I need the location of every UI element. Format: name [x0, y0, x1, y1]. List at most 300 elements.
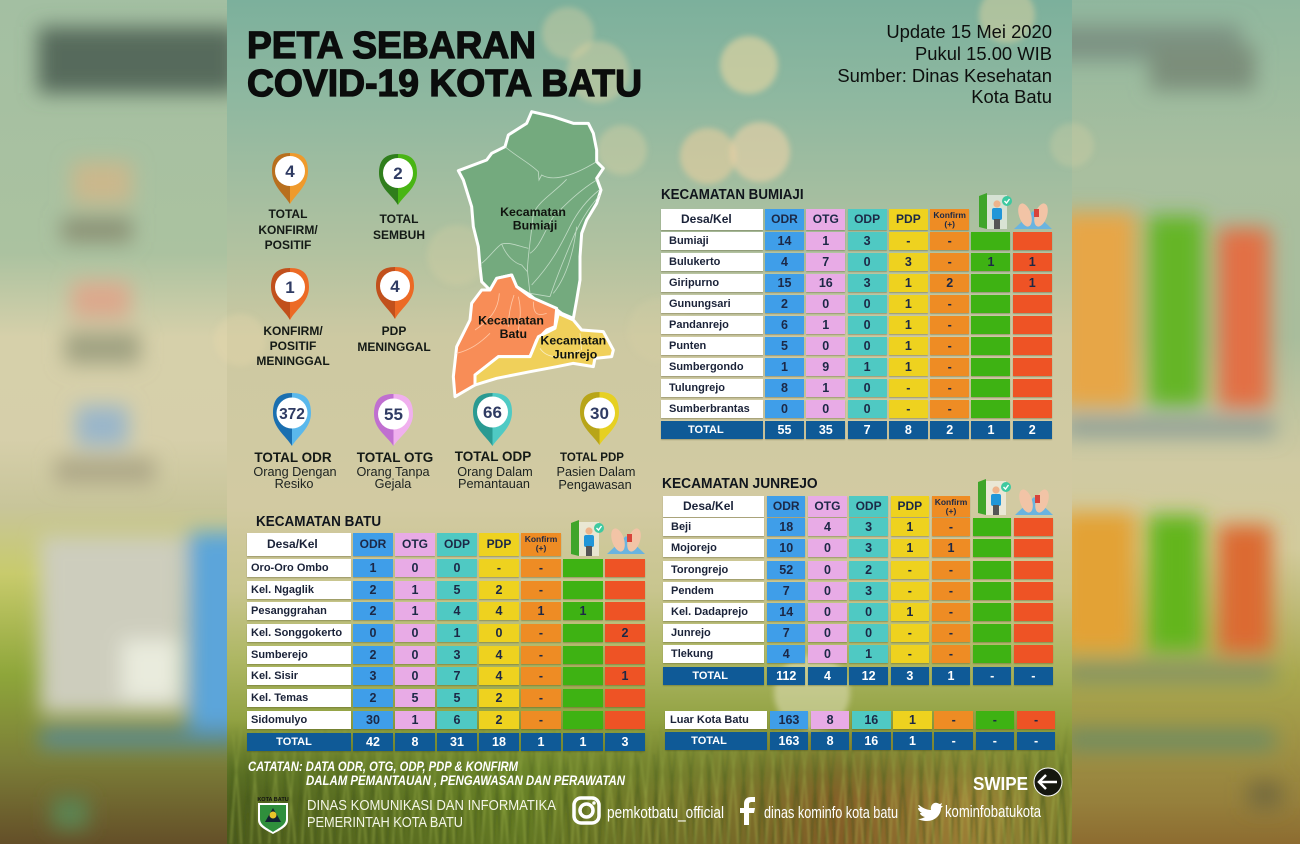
icon: facebook	[740, 797, 755, 825]
row: Kel. Dadaprejo: 14	[779, 605, 793, 619]
row: Mojorejo: 1	[906, 541, 913, 555]
row: Tulungrejo: 0	[864, 381, 871, 395]
row: Kel. Songgokerto: 2	[622, 626, 628, 640]
row: Kel. Sisir: 4	[496, 669, 502, 683]
row: Oro-Oro Ombo: 1	[370, 561, 376, 575]
row: Kel. Sisir: 0	[412, 669, 418, 683]
row: total: 1	[909, 734, 916, 748]
note text	[248, 759, 625, 788]
row: total: -	[1034, 734, 1038, 748]
row: Torongrejo: 52	[779, 563, 793, 577]
row: Luar Kota Batu: -	[952, 713, 956, 727]
table: Luar Kota Batu	[665, 711, 1053, 750]
row: total: 163	[778, 734, 799, 748]
map label: Batu: Kecamatan	[478, 313, 544, 327]
arrow: swipe left	[1034, 768, 1062, 796]
row: total: 112	[776, 669, 796, 683]
row: total: 4	[824, 669, 831, 683]
table: Kecamatan Batu	[246, 533, 646, 752]
row: Sumbergondo: 1	[781, 360, 788, 374]
table: Kecamatan Junrejo	[662, 496, 1054, 686]
row: Pandanrejo	[660, 316, 1052, 336]
map label: Junrejo: Kecamatan	[540, 334, 606, 348]
table header: Desa/Kel	[681, 212, 732, 226]
icon: recovered person, Batu	[571, 520, 604, 556]
row: total: 42	[366, 735, 380, 749]
row: Sumberbrantas: 0	[781, 402, 788, 416]
row: Sumbergondo: -	[948, 360, 952, 374]
stat: total konfirm positif: KONFIRM/	[258, 223, 318, 237]
row: Kel. Temas: 2	[496, 691, 502, 705]
row: Giripurno: 1	[1029, 276, 1036, 290]
region: Kecamatan Bumiaji	[458, 112, 603, 318]
table header: ODR	[773, 499, 800, 513]
table header: Desa/Kel	[267, 537, 318, 551]
row: total: 55	[778, 423, 791, 437]
stat: total otg: 55	[384, 405, 403, 424]
row: Junrejo: 0	[865, 626, 872, 640]
row: Kel. Songgokerto: 0	[412, 626, 418, 640]
row: Sumberbrantas: 0	[864, 402, 871, 416]
instagram handle: pemkotbatu_official	[607, 803, 724, 822]
stat: total odp: Orang Dalam	[457, 465, 533, 479]
row: Giripurno: 16	[819, 276, 833, 290]
row: Tulungrejo: Tulungrejo	[669, 382, 725, 394]
row: total: 1	[987, 423, 994, 437]
title: PETA SEBARAN	[247, 25, 536, 67]
row: Bumiaji: 14	[778, 234, 791, 248]
row: Tulungrejo: 1	[822, 381, 829, 395]
row: Kel. Dadaprejo: 0	[865, 605, 872, 619]
stat: total odp: Pemantauan	[458, 477, 530, 491]
table header: PDP	[897, 499, 922, 513]
row: Pandanrejo: 1	[905, 318, 912, 332]
row: total: TOTAL	[276, 736, 312, 748]
row: Tulungrejo: 8	[781, 381, 788, 395]
stat: total otg: TOTAL OTG	[357, 450, 433, 465]
row: Beji	[662, 518, 1054, 538]
row: Bulukerto: 7	[822, 255, 829, 269]
row: Oro-Oro Ombo: -	[497, 561, 501, 575]
table header: (+)	[944, 219, 955, 229]
row: Sumberejo: 2	[370, 648, 376, 662]
twitter handle: kominfobatukota	[945, 802, 1041, 821]
row: Sumberejo: 3	[454, 648, 460, 662]
row: Tulungrejo	[660, 379, 1052, 398]
row: Pendem	[662, 582, 1054, 602]
row: Gunungsari	[660, 295, 1052, 314]
update information text block	[837, 21, 1052, 107]
row: Luar Kota Batu: -	[1034, 713, 1038, 727]
row: Kel. Temas: -	[539, 691, 543, 705]
row: Luar Kota Batu: 8	[827, 713, 834, 727]
icon: recovered person, Junrejo	[978, 479, 1011, 515]
stat: pdp meninggal: PDP	[382, 324, 406, 338]
table header: PDP	[487, 537, 511, 551]
table header: ODR	[360, 537, 386, 551]
stat: total pdp: Pasien Dalam	[557, 465, 635, 479]
row: Luar Kota Batu: 1	[909, 713, 916, 727]
stat: total konfirm positif: 4	[285, 162, 295, 181]
row: Kel. Songgokerto	[246, 624, 646, 644]
row: Bulukerto: -	[948, 255, 952, 269]
row: Giripurno	[660, 274, 1052, 294]
row: Kel. Temas: 5	[454, 691, 460, 705]
row: total	[665, 732, 1055, 750]
table header: ODP	[854, 212, 880, 226]
region: Kecamatan Junrejo	[475, 313, 613, 385]
logo: Kota Batu crest: KOTA BATU	[257, 797, 289, 803]
row: total: 1	[538, 735, 544, 749]
row: Mojorejo: 0	[824, 541, 831, 555]
row: Bumiaji: 1	[822, 234, 829, 248]
row: Junrejo: 0	[824, 626, 831, 640]
table header: OTG	[813, 212, 839, 226]
row: Punten: 0	[822, 339, 829, 353]
background: bokeh lights and grass	[227, 0, 1094, 844]
row: Sumberejo: Sumberejo	[251, 649, 308, 661]
row: Beji: 3	[865, 520, 872, 534]
row: Kel. Sisir: 1	[622, 669, 628, 683]
row: Sidomulyo: 1	[412, 713, 418, 727]
row: Tulungrejo: -	[948, 381, 952, 395]
row: Kel. Sisir: 3	[370, 669, 376, 683]
stat: pdp meninggal	[357, 267, 431, 354]
map label: Bumiaji: Kecamatan	[500, 205, 566, 219]
row: Pendem: Pendem	[671, 585, 714, 597]
row: Kel. Ngaglik: 5	[454, 583, 460, 597]
row: total: -	[952, 734, 956, 748]
stat: total pdp: TOTAL PDP	[560, 452, 624, 464]
row: Pendem: 3	[865, 584, 872, 598]
row: Kel. Dadaprejo: 0	[824, 605, 831, 619]
row: Tulungrejo: -	[906, 381, 910, 395]
row: Sumberejo: 0	[412, 648, 418, 662]
row: Bumiaji: Bumiaji	[669, 235, 709, 247]
row: Gunungsari: Gunungsari	[669, 298, 731, 310]
stat: total konfirm positif	[258, 153, 318, 252]
row: Tlekung: 1	[865, 647, 872, 661]
row: Mojorejo	[662, 539, 1054, 558]
stat: total otg: Orang Tanpa	[356, 465, 431, 479]
stat: total pdp	[557, 392, 635, 492]
row: Sumberejo	[246, 646, 646, 666]
row: Kel. Ngaglik: Kel. Ngaglik	[251, 584, 314, 596]
table header: Desa/Kel	[683, 499, 734, 513]
note text: DALAM PEMANTAUAN , PENGAWASAN DAN PERAWATAN	[306, 773, 625, 788]
stat: konfirm positif meninggal: POSITIF	[270, 339, 316, 353]
row: Pandanrejo: 6	[781, 318, 788, 332]
table header: ODP	[444, 537, 470, 551]
row: Kel. Songgokerto: 1	[454, 626, 460, 640]
map label: Batu name: Batu	[500, 327, 527, 341]
row: total: 31	[450, 735, 464, 749]
row: Pandanrejo: -	[948, 318, 952, 332]
row: Junrejo: -	[949, 626, 953, 640]
row: Junrejo: -	[908, 626, 912, 640]
stat: total otg: Gejala	[375, 477, 412, 491]
row: Gunungsari: 0	[864, 297, 871, 311]
row: Sidomulyo: 6	[454, 713, 460, 727]
table header: PDP	[896, 212, 921, 226]
icon: recovered person, Bumiaji	[979, 193, 1012, 229]
row: Giripurno: 1	[905, 276, 912, 290]
table header	[246, 533, 562, 558]
row: Kel. Dadaprejo: 1	[906, 605, 913, 619]
row: Punten: Punten	[669, 340, 706, 352]
row: Junrejo	[662, 624, 1054, 644]
stat: total pdp: 30	[590, 404, 609, 423]
row: Punten	[660, 337, 1052, 356]
row: Giripurno: 15	[778, 276, 791, 290]
table header: (+)	[536, 543, 546, 553]
row: Luar Kota Batu: 163	[778, 713, 799, 727]
row: Luar Kota Batu: Luar Kota Batu	[670, 714, 749, 726]
stat: total konfirm positif: TOTAL	[269, 207, 307, 221]
row: Punten: 0	[864, 339, 871, 353]
row: Pendem: 7	[783, 584, 790, 598]
row: total: -	[990, 669, 994, 683]
row: total: 2	[946, 423, 953, 437]
row: Sumberbrantas: -	[906, 402, 910, 416]
note text: CATATAN: DATA ODR, OTG, ODP, PDP & KONFIRM	[248, 759, 519, 774]
stat: total sembuh	[373, 154, 425, 242]
row: Punten: 5	[781, 339, 788, 353]
row: Sumberbrantas: -	[948, 402, 952, 416]
row: Pandanrejo: Pandanrejo	[669, 319, 729, 331]
row: total: 18	[492, 735, 506, 749]
stat: total odr: 372	[279, 406, 305, 423]
row: Luar Kota Batu: 16	[864, 713, 878, 727]
row: Bumiaji: -	[948, 234, 952, 248]
row: Bulukerto: Bulukerto	[669, 256, 720, 268]
row: Mojorejo: 10	[779, 541, 793, 555]
row: Pandanrejo: 0	[864, 318, 871, 332]
row: Kel. Ngaglik	[246, 581, 646, 600]
table header: ODR	[771, 212, 798, 226]
row: Bumiaji: -	[906, 234, 910, 248]
icon: instagram	[574, 798, 599, 823]
row: Bulukerto: 0	[864, 255, 871, 269]
stat: konfirm positif meninggal: KONFIRM/	[263, 324, 323, 338]
agency name	[307, 798, 556, 831]
row: Kel. Sisir: Kel. Sisir	[251, 670, 298, 682]
stat: total odr	[253, 393, 337, 491]
row: Punten: 1	[905, 339, 912, 353]
table header: Konfirm	[933, 210, 966, 220]
row: Junrejo: Junrejo	[671, 627, 711, 639]
stat: konfirm positif meninggal	[256, 268, 330, 368]
row: Tlekung: 4	[783, 647, 790, 661]
update information text block: Sumber: Dinas Kesehatan	[837, 65, 1052, 86]
table header: Konfirm	[525, 534, 557, 544]
update information text block: Update 15 Mei 2020	[886, 21, 1052, 42]
stat: total odp: 66	[483, 403, 502, 422]
map label: Bumiaji name: Bumiaji	[513, 218, 557, 232]
row: Kel. Sisir: 7	[454, 669, 460, 683]
row: Pesanggrahan: 2	[370, 604, 376, 618]
row: total	[663, 667, 1053, 685]
row: Pendem: -	[908, 584, 912, 598]
row: Oro-Oro Ombo: 0	[412, 561, 418, 575]
row: Kel. Sisir	[246, 667, 646, 686]
row: total: 1	[948, 669, 954, 683]
table header: ODP	[856, 499, 882, 513]
row: Kel. Sisir: -	[539, 669, 543, 683]
swipe label: SWIPE	[973, 774, 1028, 794]
stat: pdp meninggal: MENINGGAL	[357, 340, 431, 354]
row: Giripurno: 3	[864, 276, 871, 290]
region: Kecamatan Batu	[453, 275, 557, 397]
row: total: 3	[622, 735, 628, 749]
row: Sumberbrantas: 0	[822, 402, 829, 416]
row: Gunungsari: 2	[781, 297, 788, 311]
row: Oro-Oro Ombo: 0	[454, 561, 460, 575]
row: Tlekung: -	[908, 647, 912, 661]
row: Sumbergondo: 1	[864, 360, 871, 374]
row: total: 8	[412, 735, 418, 749]
row: Giripurno: Giripurno	[669, 277, 719, 289]
table header: (+)	[946, 506, 956, 516]
agency name: DINAS KOMUNIKASI DAN INFORMATIKA	[307, 798, 556, 814]
row: Bulukerto	[660, 253, 1052, 272]
row: Kel. Dadaprejo: Kel. Dadaprejo	[671, 606, 748, 618]
row: total: TOTAL	[688, 424, 724, 436]
row: Sumberejo: 4	[496, 648, 502, 662]
row: Junrejo: 7	[783, 626, 790, 640]
stat: total sembuh: SEMBUH	[373, 228, 425, 242]
row: Mojorejo: 3	[865, 541, 872, 555]
row: Pendem: -	[949, 584, 953, 598]
row: Bulukerto: 1	[987, 255, 994, 269]
stat: konfirm positif meninggal: 1	[285, 278, 295, 297]
stat: konfirm positif meninggal: MENINGGAL	[256, 354, 330, 368]
row: Bulukerto: 3	[905, 255, 912, 269]
stat: total pdp: Pengawasan	[558, 478, 632, 492]
row: total: -	[1031, 669, 1035, 683]
row: Pesanggrahan: 1	[412, 604, 418, 618]
logo: Kota Batu crest	[257, 797, 289, 834]
row: total: TOTAL	[691, 735, 727, 747]
heading: Kecamatan Batu: KECAMATAN BATU	[256, 514, 381, 530]
row: Tlekung: 0	[824, 647, 831, 661]
row: total	[246, 733, 646, 752]
row: total: 35	[819, 423, 833, 437]
stat: total odp	[455, 393, 533, 491]
row: Pesanggrahan: 1	[580, 604, 586, 618]
stat: total sembuh: TOTAL	[380, 212, 418, 226]
row: Kel. Songgokerto: -	[539, 626, 543, 640]
row: Bulukerto: 4	[781, 255, 788, 269]
row: Kel. Temas: Kel. Temas	[251, 692, 308, 704]
row: total: 2	[1029, 423, 1036, 437]
row: Kel. Songgokerto: Kel. Songgokerto	[251, 627, 342, 639]
row: Torongrejo: -	[949, 563, 953, 577]
row: Kel. Songgokerto: 0	[496, 626, 502, 640]
row: Gunungsari: -	[948, 297, 952, 311]
row: Kel. Temas: 5	[412, 691, 418, 705]
icon: deceased feet, Junrejo	[1015, 490, 1053, 515]
row: Sidomulyo	[246, 711, 646, 730]
row: Sumberbrantas	[660, 400, 1052, 420]
row: Mojorejo: 1	[948, 541, 954, 555]
row: Beji: Beji	[671, 521, 691, 533]
stat: total sembuh: 2	[393, 164, 403, 183]
icon: deceased feet, Batu	[607, 528, 645, 554]
row: Sumberejo: -	[539, 648, 543, 662]
row: Kel. Ngaglik: 2	[370, 583, 376, 597]
row: total: TOTAL	[692, 670, 728, 682]
stat: total odr: Orang Dengan	[253, 465, 337, 479]
row: Oro-Oro Ombo: Oro-Oro Ombo	[251, 562, 329, 574]
row: Sidomulyo: 30	[366, 713, 380, 727]
row: Pesanggrahan	[246, 602, 646, 622]
row: Punten: -	[948, 339, 952, 353]
row: Torongrejo: 2	[865, 563, 872, 577]
row: Bumiaji: 3	[864, 234, 871, 248]
row: Tlekung	[663, 645, 1053, 663]
stat: total otg	[356, 394, 433, 491]
row: Beji: 1	[906, 520, 913, 534]
table: Kecamatan Bumiaji	[660, 209, 1052, 440]
row: Sumbergondo	[660, 358, 1052, 378]
icon: twitter	[918, 803, 943, 821]
row: Giripurno: 2	[946, 276, 953, 290]
row: Pesanggrahan: 1	[538, 604, 544, 618]
row: Gunungsari: 0	[822, 297, 829, 311]
row: Kel. Temas: 2	[370, 691, 376, 705]
facebook name: dinas kominfo kota batu	[764, 803, 898, 822]
row: total	[660, 421, 1052, 440]
stat: total odp: TOTAL ODP	[455, 449, 531, 464]
stat: total konfirm positif: POSITIF	[265, 238, 311, 252]
row: Pandanrejo: 1	[822, 318, 829, 332]
heading: Kecamatan Bumiaji: KECAMATAN BUMIAJI	[661, 187, 804, 203]
row: Sidomulyo: -	[539, 713, 543, 727]
row: Oro-Oro Ombo: -	[539, 561, 543, 575]
row: Pendem: 0	[824, 584, 831, 598]
row: Oro-Oro Ombo	[246, 559, 646, 578]
stat: pdp meninggal: 4	[390, 277, 400, 296]
row: Tlekung: -	[949, 647, 953, 661]
row: Beji: -	[949, 520, 953, 534]
icon: deceased feet, Bumiaji	[1014, 203, 1052, 229]
stat: total odr: Resiko	[275, 477, 313, 491]
row: total: 3	[906, 669, 913, 683]
table header	[660, 209, 970, 232]
row: total: 16	[864, 734, 878, 748]
row: Pesanggrahan: 4	[454, 604, 460, 618]
row: Beji: 4	[824, 520, 831, 534]
row: Kel. Ngaglik: 1	[412, 583, 418, 597]
map label: Junrejo name: Junrejo	[553, 347, 598, 361]
table header	[662, 496, 970, 518]
map of Kota Batu districts	[452, 110, 615, 398]
row: Kel. Ngaglik: -	[539, 583, 543, 597]
row: Torongrejo: 0	[824, 563, 831, 577]
row: Sumberbrantas: Sumberbrantas	[669, 403, 750, 415]
row: Pesanggrahan: Pesanggrahan	[251, 605, 327, 617]
update information text block: Pukul 15.00 WIB	[915, 43, 1052, 64]
agency name: PEMERINTAH KOTA BATU	[307, 815, 463, 831]
row: total: 8	[827, 734, 834, 748]
row: Kel. Ngaglik: 2	[496, 583, 502, 597]
row: Luar Kota Batu	[665, 711, 1055, 729]
row: Sumbergondo: 9	[822, 360, 829, 374]
row: Mojorejo: Mojorejo	[671, 542, 717, 554]
row: Luar Kota Batu: -	[993, 713, 997, 727]
table header: OTG	[402, 537, 428, 551]
